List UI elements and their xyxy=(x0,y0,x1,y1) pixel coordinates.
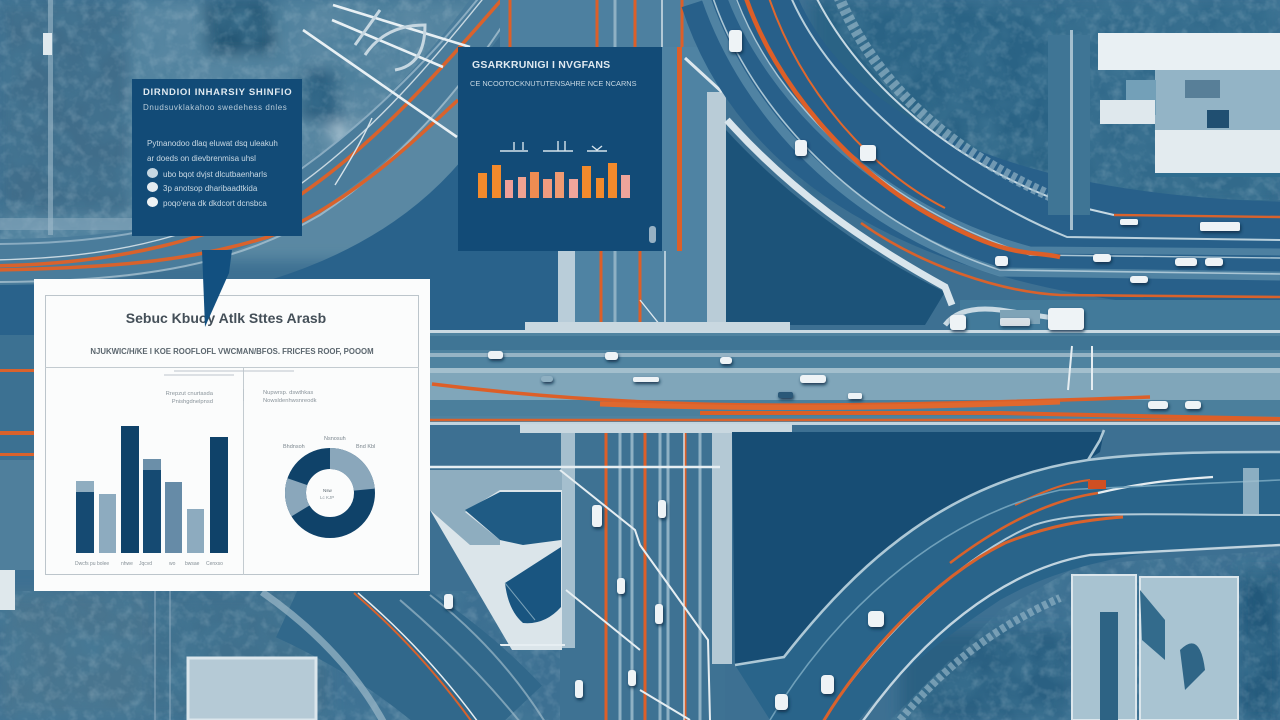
west side road strip xyxy=(0,282,40,452)
bar chart: Cenxso xyxy=(206,561,223,567)
bar chart caption: Rrepzut cnurtasda xyxy=(166,391,213,397)
bar chart: Jqcvd xyxy=(139,561,152,567)
bullet 2: 3p anotsop dharibaadtkida xyxy=(163,184,257,193)
card heading: GSARKRUNIGI I NVGFANS xyxy=(472,59,610,71)
light interchange ramp xyxy=(430,470,562,650)
bullet 2 xyxy=(147,182,258,193)
south bank strip east xyxy=(960,300,1280,330)
donut caption xyxy=(263,390,316,404)
crosswalk east xyxy=(1243,468,1259,514)
water: upper centre xyxy=(0,150,558,335)
report heading: Sebuc Kbuoy Atlk Sttes Arasb xyxy=(126,310,326,326)
chart annotations xyxy=(500,141,607,151)
water: lower right xyxy=(732,432,1104,665)
donut chart: Nsw xyxy=(323,488,332,493)
card paragraph: ar doeds on dievbrenmisa uhsl xyxy=(147,154,256,163)
bar chart: nhwe xyxy=(121,561,133,567)
bars xyxy=(478,163,630,198)
donut chart: Lc KJP xyxy=(320,495,334,500)
bar chart caption: Pnishgdnelpnsd xyxy=(172,398,213,404)
donut chart xyxy=(283,436,375,538)
bullet 3: poqo'ena dk dkdcort dcnsbca xyxy=(163,199,267,208)
red vehicle xyxy=(1088,480,1106,489)
land: top right xyxy=(810,0,1060,190)
card heading: DIRNDIOI INHARSIY SHINFIO xyxy=(143,87,292,98)
report subheading: NJUKWIC/H/KE I KOE ROOFLOFL VWCMAN/BFOS. FRICFES ROOF, POOOM xyxy=(90,347,374,356)
card subheading: CE NCOOTOCKNUTUTENSAHRE NCE NCARNS xyxy=(470,79,637,88)
donut chart: Bhdnsoh xyxy=(283,444,305,450)
callout pointer xyxy=(202,250,232,327)
report inner frame xyxy=(45,295,419,575)
bar chart xyxy=(75,426,228,567)
bar chart caption xyxy=(166,391,213,404)
buildings: top right xyxy=(1048,30,1280,230)
donut chart: Bnd Kbl xyxy=(356,444,375,450)
panel: left dark info card xyxy=(132,79,302,236)
horizontal highway xyxy=(430,322,1280,433)
donut labels: Nsnosuh xyxy=(324,436,346,442)
small corner mark xyxy=(649,226,656,243)
bars xyxy=(76,426,228,553)
road lower left xyxy=(262,585,545,720)
curved highway upper right xyxy=(705,0,1280,305)
land: bottom right xyxy=(900,630,1070,720)
card bullet list xyxy=(147,168,267,208)
card paragraph xyxy=(147,139,278,163)
card paragraph: Pytnanodoo dlaq eluwat dsq uleakuh xyxy=(147,139,278,148)
curved highway lower right xyxy=(735,430,1280,720)
vehicles xyxy=(444,30,1240,710)
curved highway upper left xyxy=(0,0,525,282)
card subheading: Dnudsuvklakahoo swedehess dnles xyxy=(143,103,287,112)
bar chart: bwsae xyxy=(185,561,200,567)
buildings: bottom xyxy=(188,575,1238,720)
panel: top dark chart card xyxy=(458,47,662,251)
vertical highway xyxy=(500,0,730,47)
bullet 1: ubo bqot dvjst dlcutbaenharls xyxy=(163,170,267,179)
land: bottom left xyxy=(0,591,150,720)
donut caption: Nupwrsp. dswthkas xyxy=(263,390,313,396)
donut caption: Nowsldenhwsnreodk xyxy=(263,398,316,404)
orange bar chart xyxy=(478,141,630,198)
bar chart: wo xyxy=(169,561,176,567)
donut segments xyxy=(295,458,364,528)
bar axis labels: Dwcfs pu bolee xyxy=(75,561,109,567)
panel: white report card xyxy=(34,279,430,591)
water: upper right xyxy=(726,130,945,325)
